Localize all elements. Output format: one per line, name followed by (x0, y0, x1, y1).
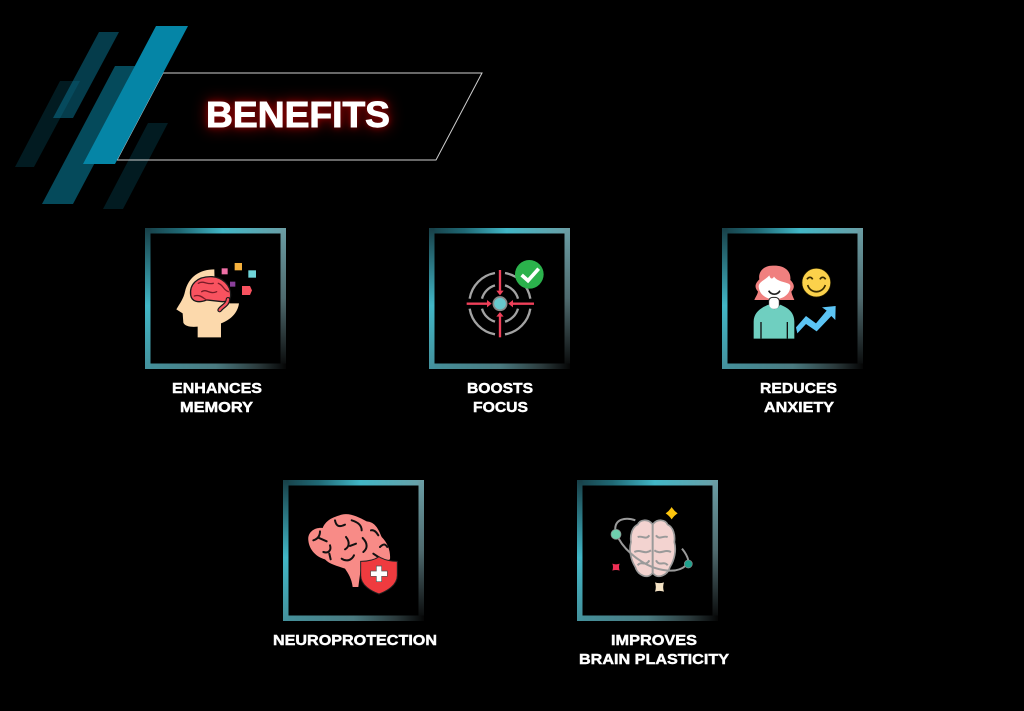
panel: reduces anxiety (722, 228, 863, 416)
icon: target with check (467, 260, 544, 337)
label (467, 380, 533, 416)
frame (429, 228, 570, 369)
icon: head with brain (176, 263, 256, 337)
panel: improves brain plasticity (577, 480, 729, 668)
decorative slanted bars (15, 32, 168, 209)
banner outline (117, 73, 482, 160)
frame (722, 228, 863, 369)
panel: enhances memory (145, 228, 286, 416)
icon: smiling woman with rising arrow (754, 266, 836, 339)
label: REDUCES (760, 380, 837, 397)
panel: boosts focus (429, 228, 570, 416)
bright bar (83, 26, 188, 164)
label: FOCUS (473, 399, 528, 416)
icon: brain with orbit and sparkles (611, 507, 692, 592)
frame (145, 228, 286, 369)
panel: neuroprotection (273, 480, 437, 649)
label: NEUROPROTECTION (273, 632, 437, 649)
label (579, 632, 729, 668)
title: BENEFITS (206, 94, 390, 135)
label: MEMORY (180, 399, 253, 416)
header banner (15, 26, 482, 209)
label (760, 380, 837, 416)
frame (577, 480, 718, 621)
label: IMPROVES (611, 632, 697, 649)
icon: brain with shield (308, 514, 397, 594)
label: ENHANCES (172, 380, 262, 397)
label (172, 380, 262, 416)
label: BRAIN PLASTICITY (579, 651, 729, 668)
frame (283, 480, 424, 621)
label: BOOSTS (467, 380, 533, 397)
label: ANXIETY (764, 399, 834, 416)
